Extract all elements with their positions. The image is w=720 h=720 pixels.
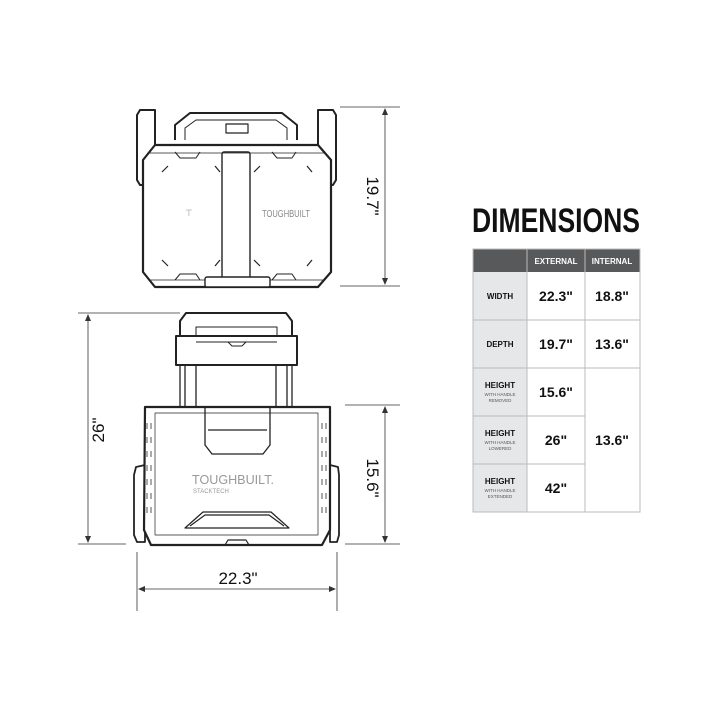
table: dimensions: DEPTH [486,340,514,349]
table: dimensions: WITH HANDLE [484,440,516,445]
top view drawing: TOUGHBUILT [262,209,310,220]
title: DIMENSIONS [472,202,640,240]
dimension: 15.6: 15.6" [363,458,382,498]
icon: side grips [134,465,339,542]
icon: top lid bump [175,113,297,140]
table: dimensions: HEIGHT [485,381,515,390]
table: dimensions: WITH HANDLE [484,488,516,493]
dimension: 22.3: 22.3" [218,569,258,588]
table: dimensions: 42" [545,480,567,496]
front view drawing [134,313,339,545]
top view drawing: ⊤ [185,208,193,218]
table: dimensions: 26" [545,432,567,448]
dimension: 19.7 [340,107,400,286]
table: dimensions: WIDTH [487,292,513,301]
table: dimensions: 19.7" [539,336,573,352]
icon: front body [144,407,330,545]
dimension: 15.6 [345,405,400,544]
table: dimensions: EXTENDED [488,494,513,499]
front view drawing: STACKTECH [193,489,229,495]
table: dimensions: EXTERNAL [534,257,578,266]
table: dimensions: 13.6" [595,336,629,352]
table: dimensions: REMOVED [489,398,512,403]
table: dimensions: 22.3" [539,288,573,304]
table: dimensions: WITH HANDLE [484,392,516,397]
table: dimensions [473,249,640,512]
front view drawing: TOUGHBUILT. [192,472,274,487]
dimension: 26 [78,313,180,544]
table: dimensions: LOWERED [489,446,512,451]
table: dimensions: 18.8" [595,288,629,304]
icon: left side handle [137,110,155,185]
table: dimensions: 13.6" [595,432,629,448]
table: dimensions: 15.6" [539,384,573,400]
icon: top view body [143,145,331,287]
table: dimensions: INTERNAL [592,257,632,266]
icon: telescoping handle [180,313,292,364]
top view drawing [137,110,336,287]
dimension: 22.3 [137,552,337,611]
dimension: 19.7: 19.7" [363,176,382,216]
icon: right side handle [318,110,336,185]
table: dimensions: HEIGHT [485,429,515,438]
dimension: 26: 26" [89,418,108,442]
table: dimensions: HEIGHT [485,477,515,486]
